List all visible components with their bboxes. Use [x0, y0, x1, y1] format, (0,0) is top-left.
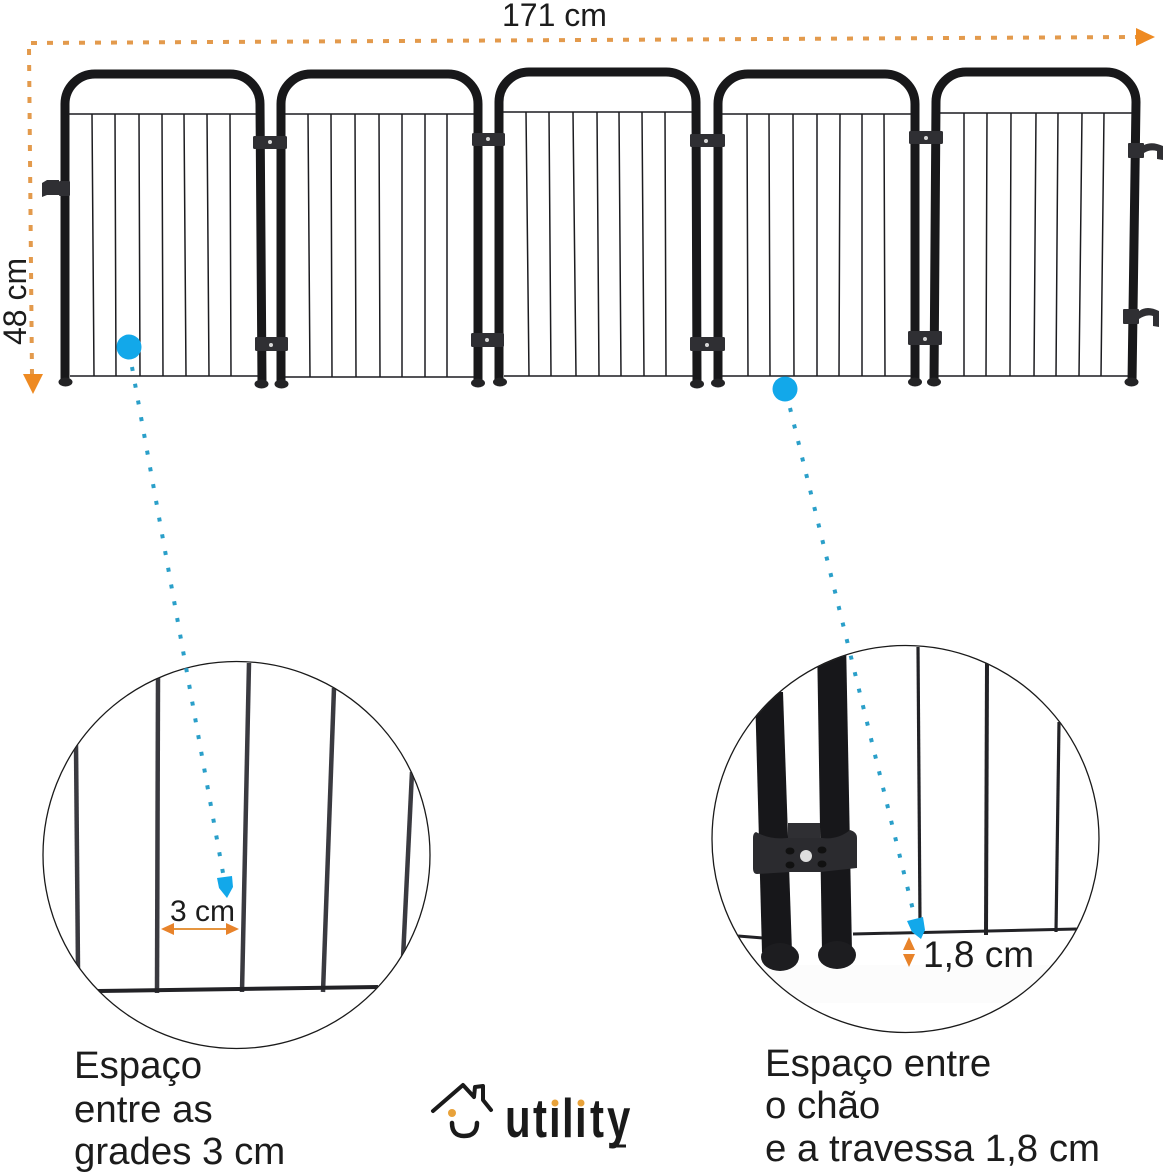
magnifier circle: wire spacing [43, 662, 430, 1048]
fence panel 3 [493, 72, 704, 388]
caption: wire spacing: Espaço [74, 1044, 202, 1087]
fence panel 1 [58, 74, 268, 388]
callout line: wire spacing [116, 334, 233, 898]
caption: floor gap: Espaço entre [765, 1042, 991, 1085]
logo: utility [433, 1085, 630, 1149]
fence: five connected panels [42, 72, 1163, 388]
caption: wire spacing: entre as [74, 1088, 213, 1131]
side latches [42, 143, 1163, 327]
caption: wire spacing: grades 3 cm [74, 1130, 285, 1173]
caption: floor gap: o chão [765, 1084, 880, 1127]
magnifier circle: floor gap [712, 640, 1099, 1032]
fence panel 2 [274, 74, 485, 388]
width dimension: 171 cm [31, 0, 1155, 46]
wordmark: utility [505, 1089, 630, 1149]
measurement: 3 cm: 3 cm [170, 895, 235, 928]
measurement: 3 cm [161, 895, 239, 935]
connector clips between panels [253, 131, 943, 351]
fence panel 4 [711, 74, 922, 388]
caption: floor gap [765, 1042, 1100, 1170]
measurement: 1,8 cm: 1,8 cm [923, 934, 1034, 975]
icon: house with smile [433, 1085, 491, 1136]
caption: floor gap: e a travessa 1,8 cm [765, 1127, 1100, 1170]
fence panel 5 [927, 72, 1138, 386]
caption: wire spacing [74, 1044, 285, 1173]
tubes with feet and clamp [753, 640, 857, 971]
height dimension: 48 cm [0, 49, 43, 394]
callout line: floor gap [772, 376, 925, 939]
